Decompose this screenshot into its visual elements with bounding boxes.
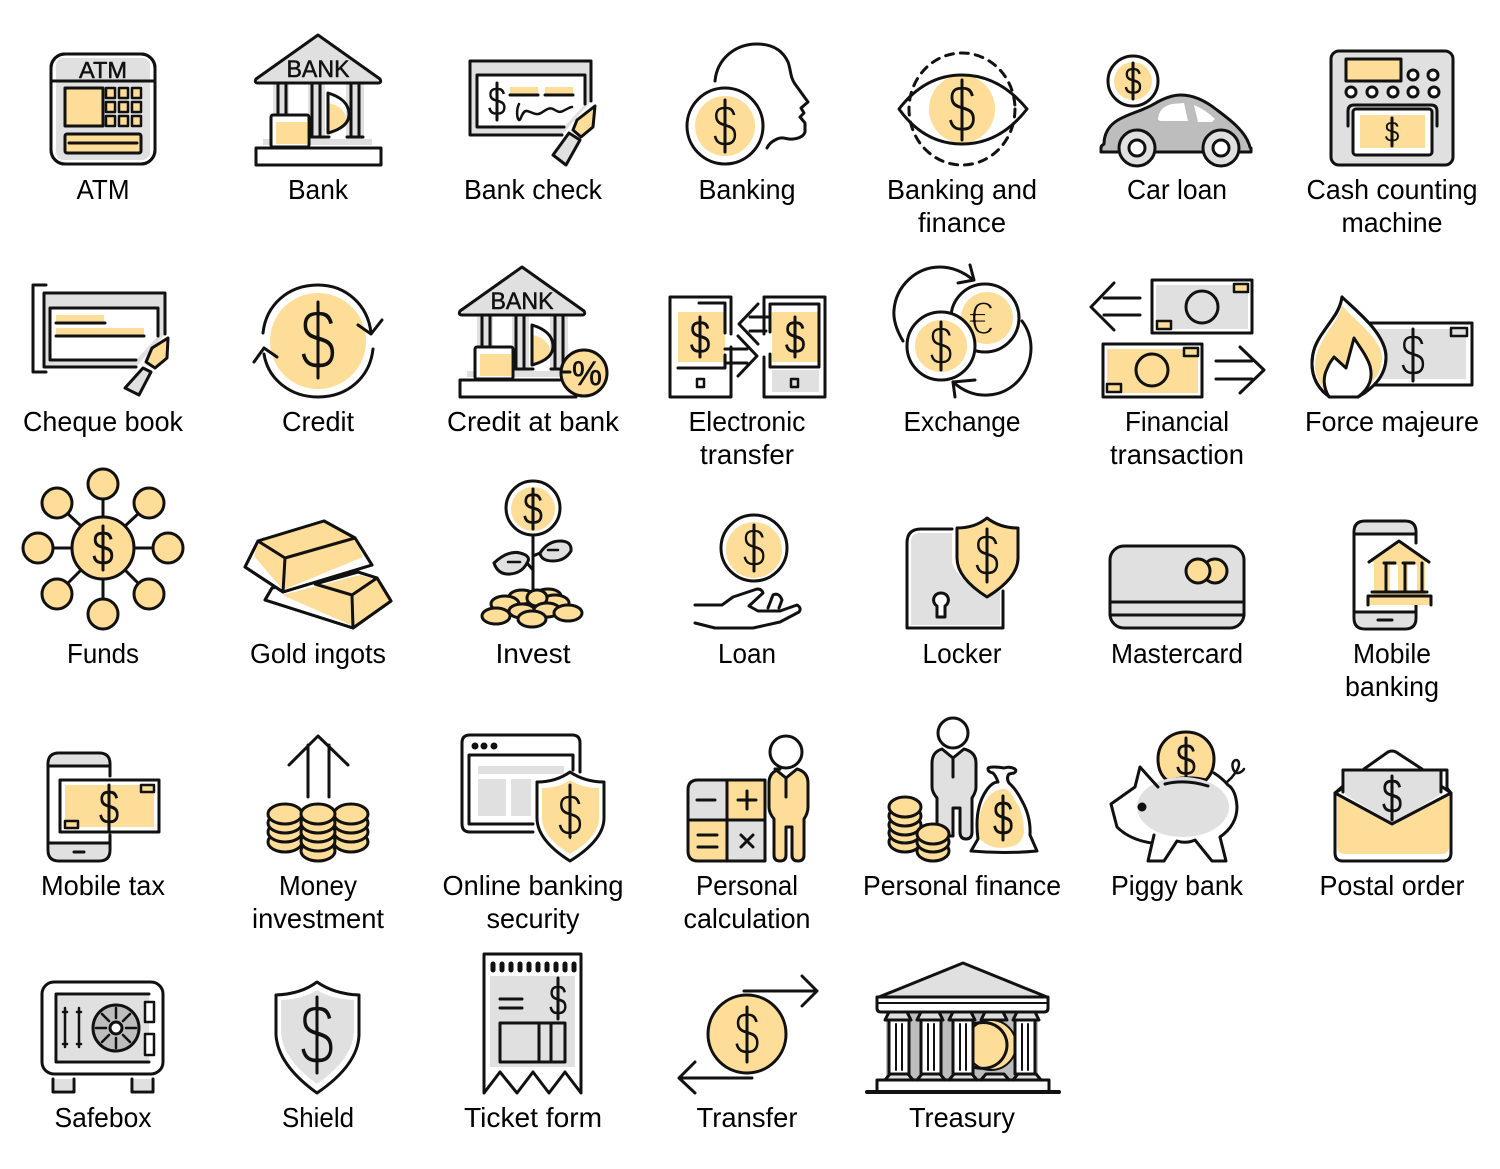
label: Loan: Loan xyxy=(718,638,776,669)
icon: Banking and finance: $ xyxy=(948,70,976,147)
icon: Invest xyxy=(482,481,582,627)
icon: Banking xyxy=(687,44,808,164)
label: Banking and finance: finance xyxy=(918,207,1006,238)
label: Money investment: investment xyxy=(252,903,384,934)
icon: Bank check xyxy=(470,61,595,165)
icon: Money investment xyxy=(268,736,368,861)
label: Financial transaction: transaction xyxy=(1110,439,1244,470)
icon: Loan xyxy=(695,515,800,628)
icon: Transfer xyxy=(679,976,817,1093)
icon: Bank check: $ xyxy=(488,79,506,125)
label: Cheque book: Cheque book xyxy=(23,406,184,437)
icon: Funds: $ xyxy=(92,520,114,576)
label: Financial transaction xyxy=(1110,406,1244,470)
icon: Credit at bank: % xyxy=(572,355,602,393)
icon: Ticket form xyxy=(484,954,581,1093)
icon: Loan: $ xyxy=(742,517,766,579)
icon: Credit at bank xyxy=(459,267,607,397)
icon: Electronic transfer: $ xyxy=(689,311,711,364)
icon: Bank xyxy=(255,35,381,165)
icon: Exchange xyxy=(894,265,1031,397)
label: Mobile banking: banking xyxy=(1345,671,1439,702)
icon: Banking and finance xyxy=(899,53,1027,165)
label: Financial transaction: Financial xyxy=(1125,406,1229,437)
label: Banking: Banking xyxy=(698,174,796,205)
label: Cash counting machine: machine xyxy=(1342,207,1442,238)
label: Bank: Bank xyxy=(288,174,349,205)
icon: Car loan xyxy=(1101,56,1251,166)
icon: Online banking security: $ xyxy=(557,782,583,849)
icon: Online banking security xyxy=(462,735,604,861)
icon: Electronic transfer xyxy=(670,297,825,397)
label: Mobile banking xyxy=(1345,638,1439,702)
icon: Postal order xyxy=(1335,751,1451,861)
icon: Credit: $ xyxy=(300,292,336,389)
icon: Car loan: $ xyxy=(1124,58,1142,103)
label: Mobile tax: Mobile tax xyxy=(41,870,165,901)
icon: Personal finance: $ xyxy=(993,791,1013,846)
icon: Postal order: $ xyxy=(1382,769,1402,824)
icon: Shield xyxy=(276,982,359,1093)
label: Electronic transfer: Electronic xyxy=(688,406,806,437)
label: Mobile banking: Mobile xyxy=(1353,638,1431,669)
label: Mastercard: Mastercard xyxy=(1111,638,1243,669)
icon: Force majeure: $ xyxy=(1400,322,1426,389)
icon: Cash counting machine xyxy=(1331,51,1453,165)
label: Credit: Credit xyxy=(282,406,354,437)
label: Personal finance: Personal finance xyxy=(863,870,1061,901)
icon: Electronic transfer: $ xyxy=(784,311,806,364)
label: ATM: ATM xyxy=(76,174,130,205)
icon: Exchange: $ xyxy=(929,315,953,377)
icon: Piggy bank xyxy=(1111,732,1244,861)
label: Force majeure: Force majeure xyxy=(1305,406,1479,437)
label: Personal calculation xyxy=(684,870,810,934)
icon: Mastercard xyxy=(1110,546,1244,628)
icon: Shield: $ xyxy=(300,987,334,1084)
label: Shield: Shield xyxy=(282,1102,354,1133)
label: Online banking security xyxy=(442,870,624,934)
label: Gold ingots: Gold ingots xyxy=(250,638,386,669)
icon: ATM: ATM xyxy=(79,57,127,83)
label: Personal calculation: Personal xyxy=(696,870,798,901)
label: Money investment: Money xyxy=(279,870,357,901)
icon: Funds xyxy=(23,469,183,629)
label: Piggy bank: Piggy bank xyxy=(1111,870,1244,901)
icon: Personal calculation xyxy=(688,736,808,861)
icon: Cheque book xyxy=(33,285,168,395)
icon: Treasury xyxy=(867,963,1059,1092)
label: Ticket form: Ticket form xyxy=(464,1102,602,1133)
label: Safebox: Safebox xyxy=(54,1102,152,1133)
label: Banking and finance xyxy=(887,174,1037,238)
icon: Cash counting machine: $ xyxy=(1384,116,1400,150)
icon: Exchange: € xyxy=(968,292,994,344)
icon: Piggy bank: $ xyxy=(1176,734,1196,786)
icon: Ticket form: $ xyxy=(549,976,567,1025)
label: Online banking security: security xyxy=(486,903,580,934)
label: Cash counting machine: Cash counting xyxy=(1306,174,1478,205)
label: Funds: Funds xyxy=(67,638,139,669)
icon: Bank: BANK xyxy=(286,56,350,83)
icon: Gold ingots xyxy=(245,521,391,628)
label: Postal order: Postal order xyxy=(1320,870,1464,901)
icon: Safebox xyxy=(42,982,163,1092)
label: Invest: Invest xyxy=(496,638,571,669)
label: Treasury: Treasury xyxy=(909,1102,1015,1133)
label: Electronic transfer xyxy=(688,406,806,470)
icon: Personal finance xyxy=(889,718,1037,861)
label: Online banking security: Online banking xyxy=(442,870,624,901)
icon: Mobile tax xyxy=(48,753,159,861)
label: Cash counting machine xyxy=(1306,174,1478,238)
icon: Financial transaction xyxy=(1091,280,1264,397)
icon: Credit at bank: BANK xyxy=(490,288,554,315)
icon: Credit xyxy=(254,285,382,397)
label: Transfer: Transfer xyxy=(696,1102,798,1133)
icon: Mobile banking xyxy=(1354,521,1431,629)
label: Money investment xyxy=(252,870,384,934)
label: Electronic transfer: transfer xyxy=(700,439,794,470)
label: Credit at bank: Credit at bank xyxy=(447,406,620,437)
label: Car loan: Car loan xyxy=(1127,174,1227,205)
label: Locker: Locker xyxy=(922,638,1002,669)
label: Exchange: Exchange xyxy=(904,406,1020,437)
icon: Banking: $ xyxy=(712,93,738,160)
icon: ATM xyxy=(51,54,155,164)
icon: Locker xyxy=(907,518,1018,628)
icon: Invest: $ xyxy=(523,483,543,535)
label: Banking and finance: Banking and xyxy=(887,174,1037,205)
label: Personal calculation: calculation xyxy=(684,903,810,934)
label: Bank check: Bank check xyxy=(464,174,603,205)
icon: Force majeure xyxy=(1312,297,1472,397)
icon: Locker: $ xyxy=(974,522,1000,589)
icon: Transfer: $ xyxy=(734,999,760,1069)
icon: Mobile tax: $ xyxy=(99,780,119,835)
